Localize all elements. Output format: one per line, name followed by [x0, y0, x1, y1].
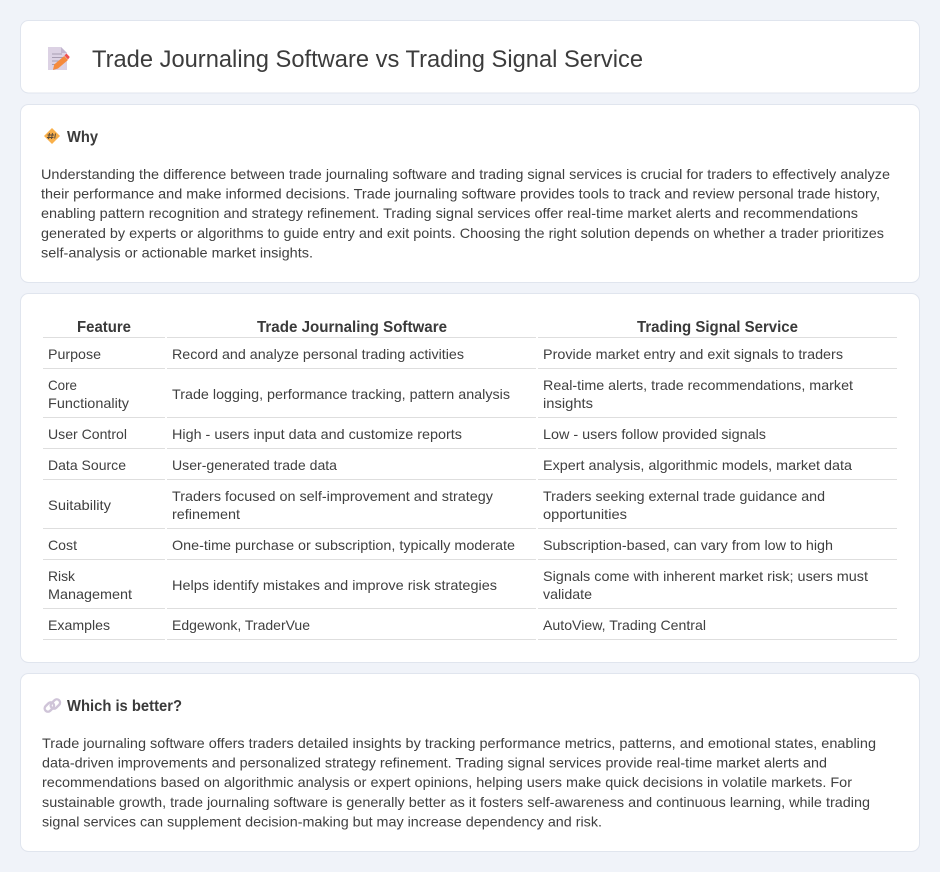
row: data source: User-generated trade data [172, 457, 337, 473]
row: cost [48, 537, 833, 553]
row: suitability: Suitability [48, 497, 111, 513]
row: cost: One-time purchase or subscription, typically moderate [172, 537, 515, 553]
heading: which is better: Which is better? [67, 698, 182, 715]
text block: why explanation: Understanding the difference between trade journaling software and trading signal services is crucial for traders to effectively analyze [41, 166, 890, 182]
row: suitability: opportunities [543, 506, 627, 522]
row: cost: Cost [48, 537, 77, 553]
row: user control: Low - users follow provided signals [543, 426, 766, 442]
text block: why explanation: their performance and make informed decisions. Trade journaling software provides tools to track and review personal trade history, [41, 186, 880, 202]
table header row: Feature [77, 319, 131, 336]
text block: verdict [42, 735, 876, 829]
icon: diamond sign [44, 128, 60, 144]
text block: verdict: sustainable growth, trade journaling software is generally better as it fosters self-awareness and continuous learning, while trading [42, 794, 870, 810]
row: examples [48, 617, 706, 633]
table header row [77, 319, 798, 336]
row: suitability: Traders focused on self-improvement and strategy [172, 488, 493, 504]
row: suitability [48, 488, 825, 522]
row: examples: Edgewonk, TraderVue [172, 617, 310, 633]
row: core functionality: Trade logging, performance tracking, pattern analysis [172, 386, 510, 402]
panel: why [20, 104, 920, 282]
row: core functionality: Real-time alerts, trade recommendations, market [543, 377, 853, 393]
row: user control [48, 426, 766, 442]
row: examples: Examples [48, 617, 110, 633]
text block: verdict: recommendations based on algorithmic analysis or expert opinions, helping users make quick decisions in volatile markets. For [42, 774, 852, 790]
row: core functionality: Functionality [48, 395, 129, 411]
row: user control: User Control [48, 426, 127, 442]
row: purpose: Purpose [48, 346, 101, 362]
row: suitability: Traders seeking external trade guidance and [543, 488, 825, 504]
row: core functionality: Core [48, 377, 77, 393]
row: data source [48, 457, 852, 473]
icon: chain link [43, 698, 61, 713]
text block: verdict: data-driven improvements and personalized strategy refinement. Trading signal services provide real-time market alerts and [42, 755, 827, 771]
text block: why explanation [41, 166, 890, 260]
row: risk management: Management [48, 586, 132, 602]
text block: why explanation: enabling pattern recognition and strategy refinement. Trading signal services offer real-time market alerts and recommendations [41, 205, 858, 221]
table header row: Trade Journaling Software [257, 319, 447, 336]
icon: memo with pencil [48, 47, 70, 70]
row: risk management: validate [543, 586, 592, 602]
row: suitability: refinement [172, 506, 240, 522]
text block: verdict: Trade journaling software offers traders detailed insights by tracking performance metrics, patterns, and emotional states, enabling [42, 735, 876, 751]
row: risk management: Helps identify mistakes and improve risk strategies [172, 577, 497, 593]
heading: why: Why [67, 129, 98, 146]
row: risk management [48, 568, 868, 602]
panel: which is better [20, 674, 920, 852]
row: risk management: Risk [48, 568, 76, 584]
row: purpose: Record and analyze personal trading activities [172, 346, 464, 362]
row: user control: High - users input data and customize reports [172, 426, 462, 442]
row: data source: Data Source [48, 457, 126, 473]
title: Trade Journaling Software vs Trading Signal Service [92, 46, 643, 73]
row: data source: Expert analysis, algorithmic models, market data [543, 457, 852, 473]
panel: title header [20, 20, 920, 93]
text block: verdict: signal services can supplement decision-making but may increase dependency and risk. [42, 813, 602, 829]
table header row: Trading Signal Service [637, 319, 798, 336]
row: core functionality [48, 377, 853, 411]
row: purpose [48, 346, 843, 362]
text block: why explanation: self-analysis or actionable market insights. [41, 244, 313, 260]
row: core functionality: insights [543, 395, 593, 411]
panel: comparison table [20, 294, 920, 662]
row: cost: Subscription-based, can vary from low to high [543, 537, 833, 553]
row: examples: AutoView, Trading Central [543, 617, 706, 633]
text block: why explanation: generated by experts or algorithms to guide entry and exit points. Choosing the right solution depends on whether a trader prioritizes [41, 225, 884, 241]
row: purpose: Provide market entry and exit signals to traders [543, 346, 843, 362]
row: risk management: Signals come with inherent market risk; users must [543, 568, 868, 584]
